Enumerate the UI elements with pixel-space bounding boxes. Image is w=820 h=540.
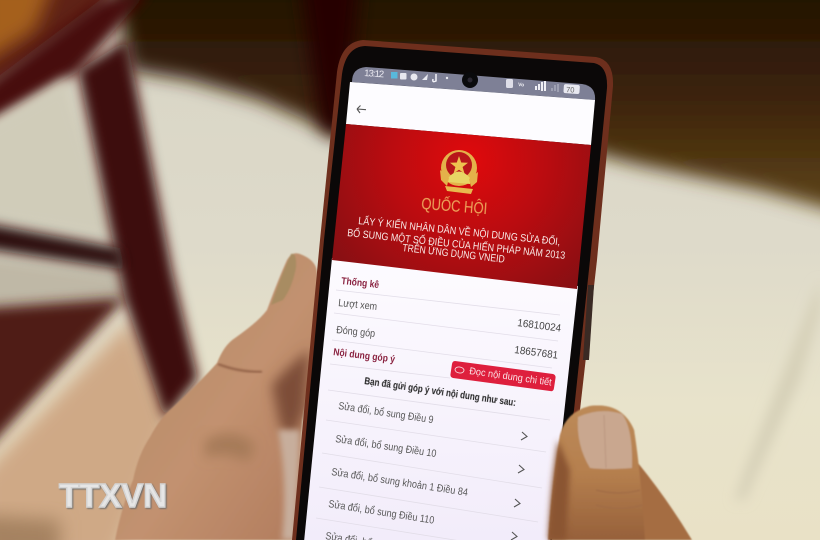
statistics section: Thống kê bbox=[341, 275, 380, 291]
list of amendments: Sửa đổi, bổ sung khoản 1 Điều 84 bbox=[331, 466, 469, 499]
statistics section: Đóng góp bbox=[336, 324, 376, 340]
separators bbox=[316, 290, 560, 540]
watermark: TTXVN: TTXVN bbox=[59, 477, 167, 514]
list of amendments: Sửa đổi, bổ sung Điều 10 bbox=[335, 433, 437, 460]
intro sentence: Bạn đã gửi góp ý với nội dung như sau: bbox=[364, 376, 517, 409]
button: read details: Đọc nội dung chi tiết bbox=[469, 365, 553, 389]
statistics section: Nội dung góp ý bbox=[333, 347, 396, 366]
list of amendments bbox=[325, 400, 469, 540]
status bar bbox=[350, 67, 595, 108]
headline text: LẤY Ý KIẾN NHÂN DÂN VỀ NỘI DUNG SỬA ĐỔI, bbox=[358, 214, 561, 248]
headline text bbox=[347, 214, 566, 266]
chair: lower floor and dark wood bbox=[0, 320, 172, 540]
status bar: 13:12 bbox=[364, 68, 385, 80]
list of amendments: Sửa đổi, bổ sung Điều 110 bbox=[328, 498, 435, 527]
thumbnail bbox=[271, 254, 296, 305]
statistics section: 16810024 bbox=[517, 317, 562, 335]
button: read details bbox=[450, 361, 556, 391]
phone screen bbox=[304, 67, 595, 540]
right thumbnail bbox=[578, 411, 632, 469]
left hand holding the phone bbox=[115, 253, 317, 540]
right hand thumb bbox=[548, 406, 692, 540]
statistics section: 18657681 bbox=[514, 344, 559, 362]
back arrow bbox=[357, 106, 366, 113]
status bar: Vo bbox=[518, 82, 524, 88]
chair: upper-left wood bbox=[0, 0, 130, 95]
statistics section: Lượt xem bbox=[338, 297, 378, 313]
title: Quốc hội: QUỐC HỘI bbox=[421, 193, 488, 218]
list chevrons bbox=[511, 432, 527, 540]
white content panel bbox=[304, 258, 578, 540]
statistics section bbox=[333, 275, 562, 366]
white app bar bbox=[346, 82, 595, 145]
phone side buttons bbox=[583, 285, 594, 360]
headline text: BỔ SUNG MỘT SỐ ĐIỀU CỦA HIẾN PHÁP NĂM 2013 bbox=[347, 225, 566, 262]
status bar: 70 bbox=[566, 85, 575, 95]
list of amendments: Sửa đổi, bổ sung Điều 9 bbox=[338, 400, 434, 426]
camera hole bbox=[462, 72, 478, 88]
national emblem bbox=[440, 150, 478, 194]
headline text: TRÊN ỨNG DỤNG VNEID bbox=[402, 241, 506, 266]
phone body bbox=[292, 40, 613, 540]
red header banner bbox=[332, 124, 591, 289]
